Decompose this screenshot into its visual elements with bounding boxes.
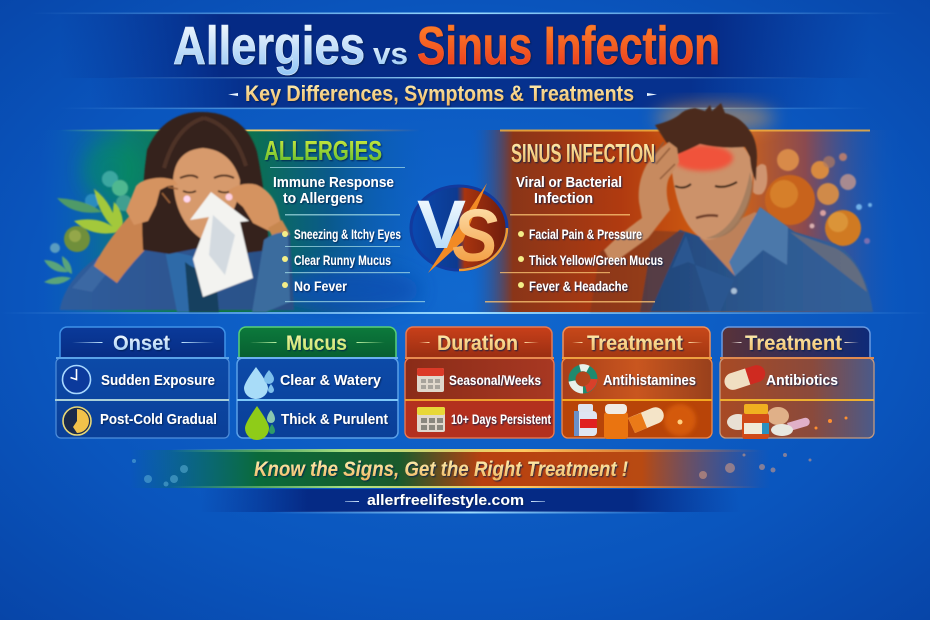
row text: duration: 10+ Days Persistent xyxy=(451,412,551,427)
icon: yellow calendar xyxy=(417,407,445,432)
text: antibiotics: Antibiotics xyxy=(766,372,838,389)
title band xyxy=(30,12,900,109)
text: immune response xyxy=(273,174,394,207)
row text: duration: Seasonal/Weeks xyxy=(449,372,541,388)
icon: clear drops xyxy=(244,367,274,399)
row text: onset xyxy=(100,372,217,428)
website band xyxy=(200,489,740,514)
card: mucus xyxy=(237,327,398,440)
row text: onset: Sudden Exposure xyxy=(101,372,215,389)
title xyxy=(173,16,720,76)
card: treatment antibiotics xyxy=(720,327,874,439)
VS badge xyxy=(411,183,507,277)
text: viral or bacterial: Viral or Bacterial xyxy=(516,174,622,191)
allergy symptom list xyxy=(270,167,425,302)
card: onset xyxy=(55,327,229,438)
row text: duration xyxy=(449,372,551,427)
website band: allerfreelifestyle.com xyxy=(367,492,524,509)
header: treatment: Treatment xyxy=(745,332,842,355)
tagline: Know the Signs, Get the Right Treatment ! xyxy=(254,458,628,481)
VS badge: V xyxy=(417,186,466,263)
heading: sinus infection: SINUS INFECTION xyxy=(511,138,655,168)
title: vs xyxy=(373,36,408,71)
sinus symptom list: Thick Yellow/Green Mucus xyxy=(529,252,663,268)
sinus symptom list: Fever & Headache xyxy=(529,278,628,294)
card: treatment antihistamines xyxy=(562,327,712,439)
sinus symptom list xyxy=(485,214,663,302)
text: antihistamines: Antihistamines xyxy=(603,372,696,389)
panel: sinus infection xyxy=(470,103,900,312)
row text: mucus: Clear & Watery xyxy=(280,372,382,389)
row text: onset: Post-Cold Gradual xyxy=(100,411,217,428)
illustration: leaves and pollen xyxy=(44,140,252,303)
icon: capsule ring xyxy=(572,368,594,390)
decorative sparkles xyxy=(132,459,188,486)
icon: clock xyxy=(62,366,90,394)
sinus symptom list: Facial Pain & Pressure xyxy=(529,226,642,242)
icon: green drops xyxy=(245,406,275,440)
title: Allergies xyxy=(173,16,365,76)
allergy symptom list: Clear Runny Mucus xyxy=(294,252,391,268)
text: viral or bacterial xyxy=(516,174,622,207)
panel: allergies xyxy=(0,112,930,314)
illustration: virus particles xyxy=(765,149,872,246)
text: viral or bacterial: Infection xyxy=(534,190,593,207)
icon: medicine bottles xyxy=(574,404,682,439)
row text: mucus xyxy=(280,372,388,428)
header: treatment: Treatment xyxy=(587,332,683,355)
text: immune response: Immune Response xyxy=(273,174,394,191)
icon: red capsule xyxy=(722,363,767,392)
illustration: man with headache xyxy=(590,103,873,312)
row text: mucus: Thick & Purulent xyxy=(281,411,388,428)
title: Sinus Infection xyxy=(417,16,720,76)
VS badge: S xyxy=(452,194,498,277)
header: duration: Duration xyxy=(437,332,518,355)
card: duration xyxy=(405,327,554,438)
footer banner xyxy=(130,449,812,488)
heading: allergies: ALLERGIES xyxy=(264,135,382,166)
icon: half clock xyxy=(63,407,91,435)
allergy symptom list: Sneezing & Itchy Eyes xyxy=(294,226,401,242)
text: immune response: to Allergens xyxy=(283,190,363,207)
header: onset: Onset xyxy=(113,332,170,355)
subtitle: Key Differences, Symptoms & Treatments xyxy=(245,81,634,106)
allergy symptom list: No Fever xyxy=(294,278,347,294)
header: mucus: Mucus xyxy=(286,332,347,355)
icon: red calendar xyxy=(417,368,444,392)
icon: pills and bottle xyxy=(727,404,848,439)
illustration: woman with tissue xyxy=(60,112,294,312)
